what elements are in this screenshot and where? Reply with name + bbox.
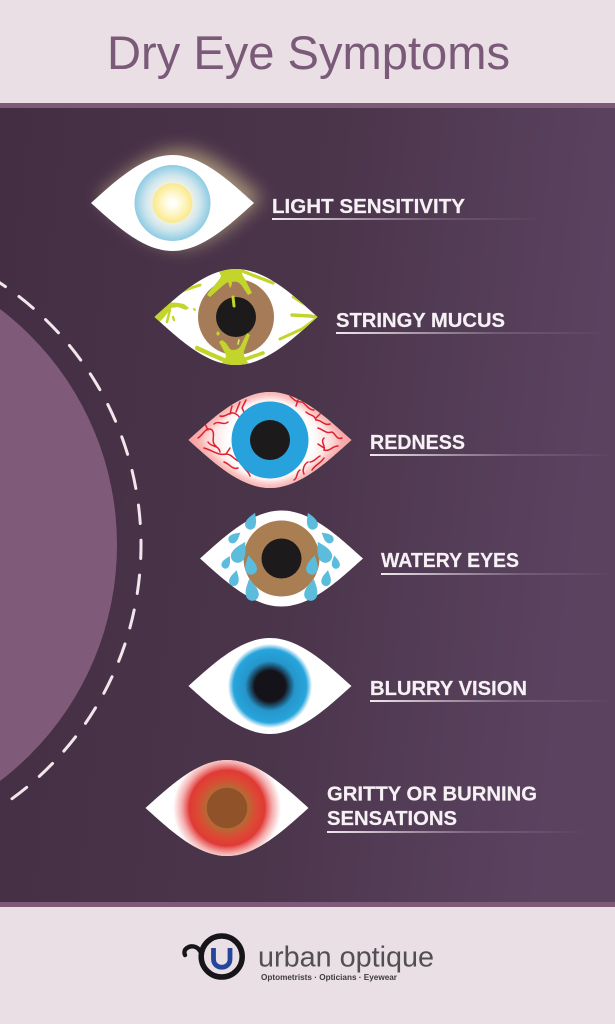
label: redness: REDNESS (370, 431, 465, 454)
label: stringy mucus: STRINGY MUCUS (336, 309, 505, 332)
logo tagline: Optometrists · Opticians · Eyewear (261, 973, 397, 982)
label: gritty or burning sensations (327, 782, 587, 833)
eye: gritty or burning (146, 760, 308, 856)
eye: stringy mucus (154, 267, 318, 367)
label: blurry vision: BLURRY VISION (370, 677, 527, 700)
label: gritty or burning sensations: GRITTY OR BURNING (327, 782, 537, 806)
eye: blurry vision (188, 638, 352, 734)
label: gritty or burning sensations: SENSATIONS (327, 807, 457, 830)
eye: light sensitivity (91, 150, 262, 251)
large circle with dashed ring (0, 231, 141, 859)
footer band (0, 907, 615, 1024)
logo: urban optique (184, 936, 434, 982)
header band (0, 0, 615, 104)
label: light sensitivity: LIGHT SENSITIVITY (272, 195, 465, 218)
title: Dry Eye Symptoms (107, 26, 510, 79)
panel: dark background (0, 103, 615, 907)
logo mark (184, 936, 242, 977)
eye: redness (188, 392, 352, 488)
logo name: urban optique (258, 942, 434, 974)
eye: watery eyes (200, 510, 363, 606)
label: watery eyes: WATERY EYES (381, 549, 519, 572)
